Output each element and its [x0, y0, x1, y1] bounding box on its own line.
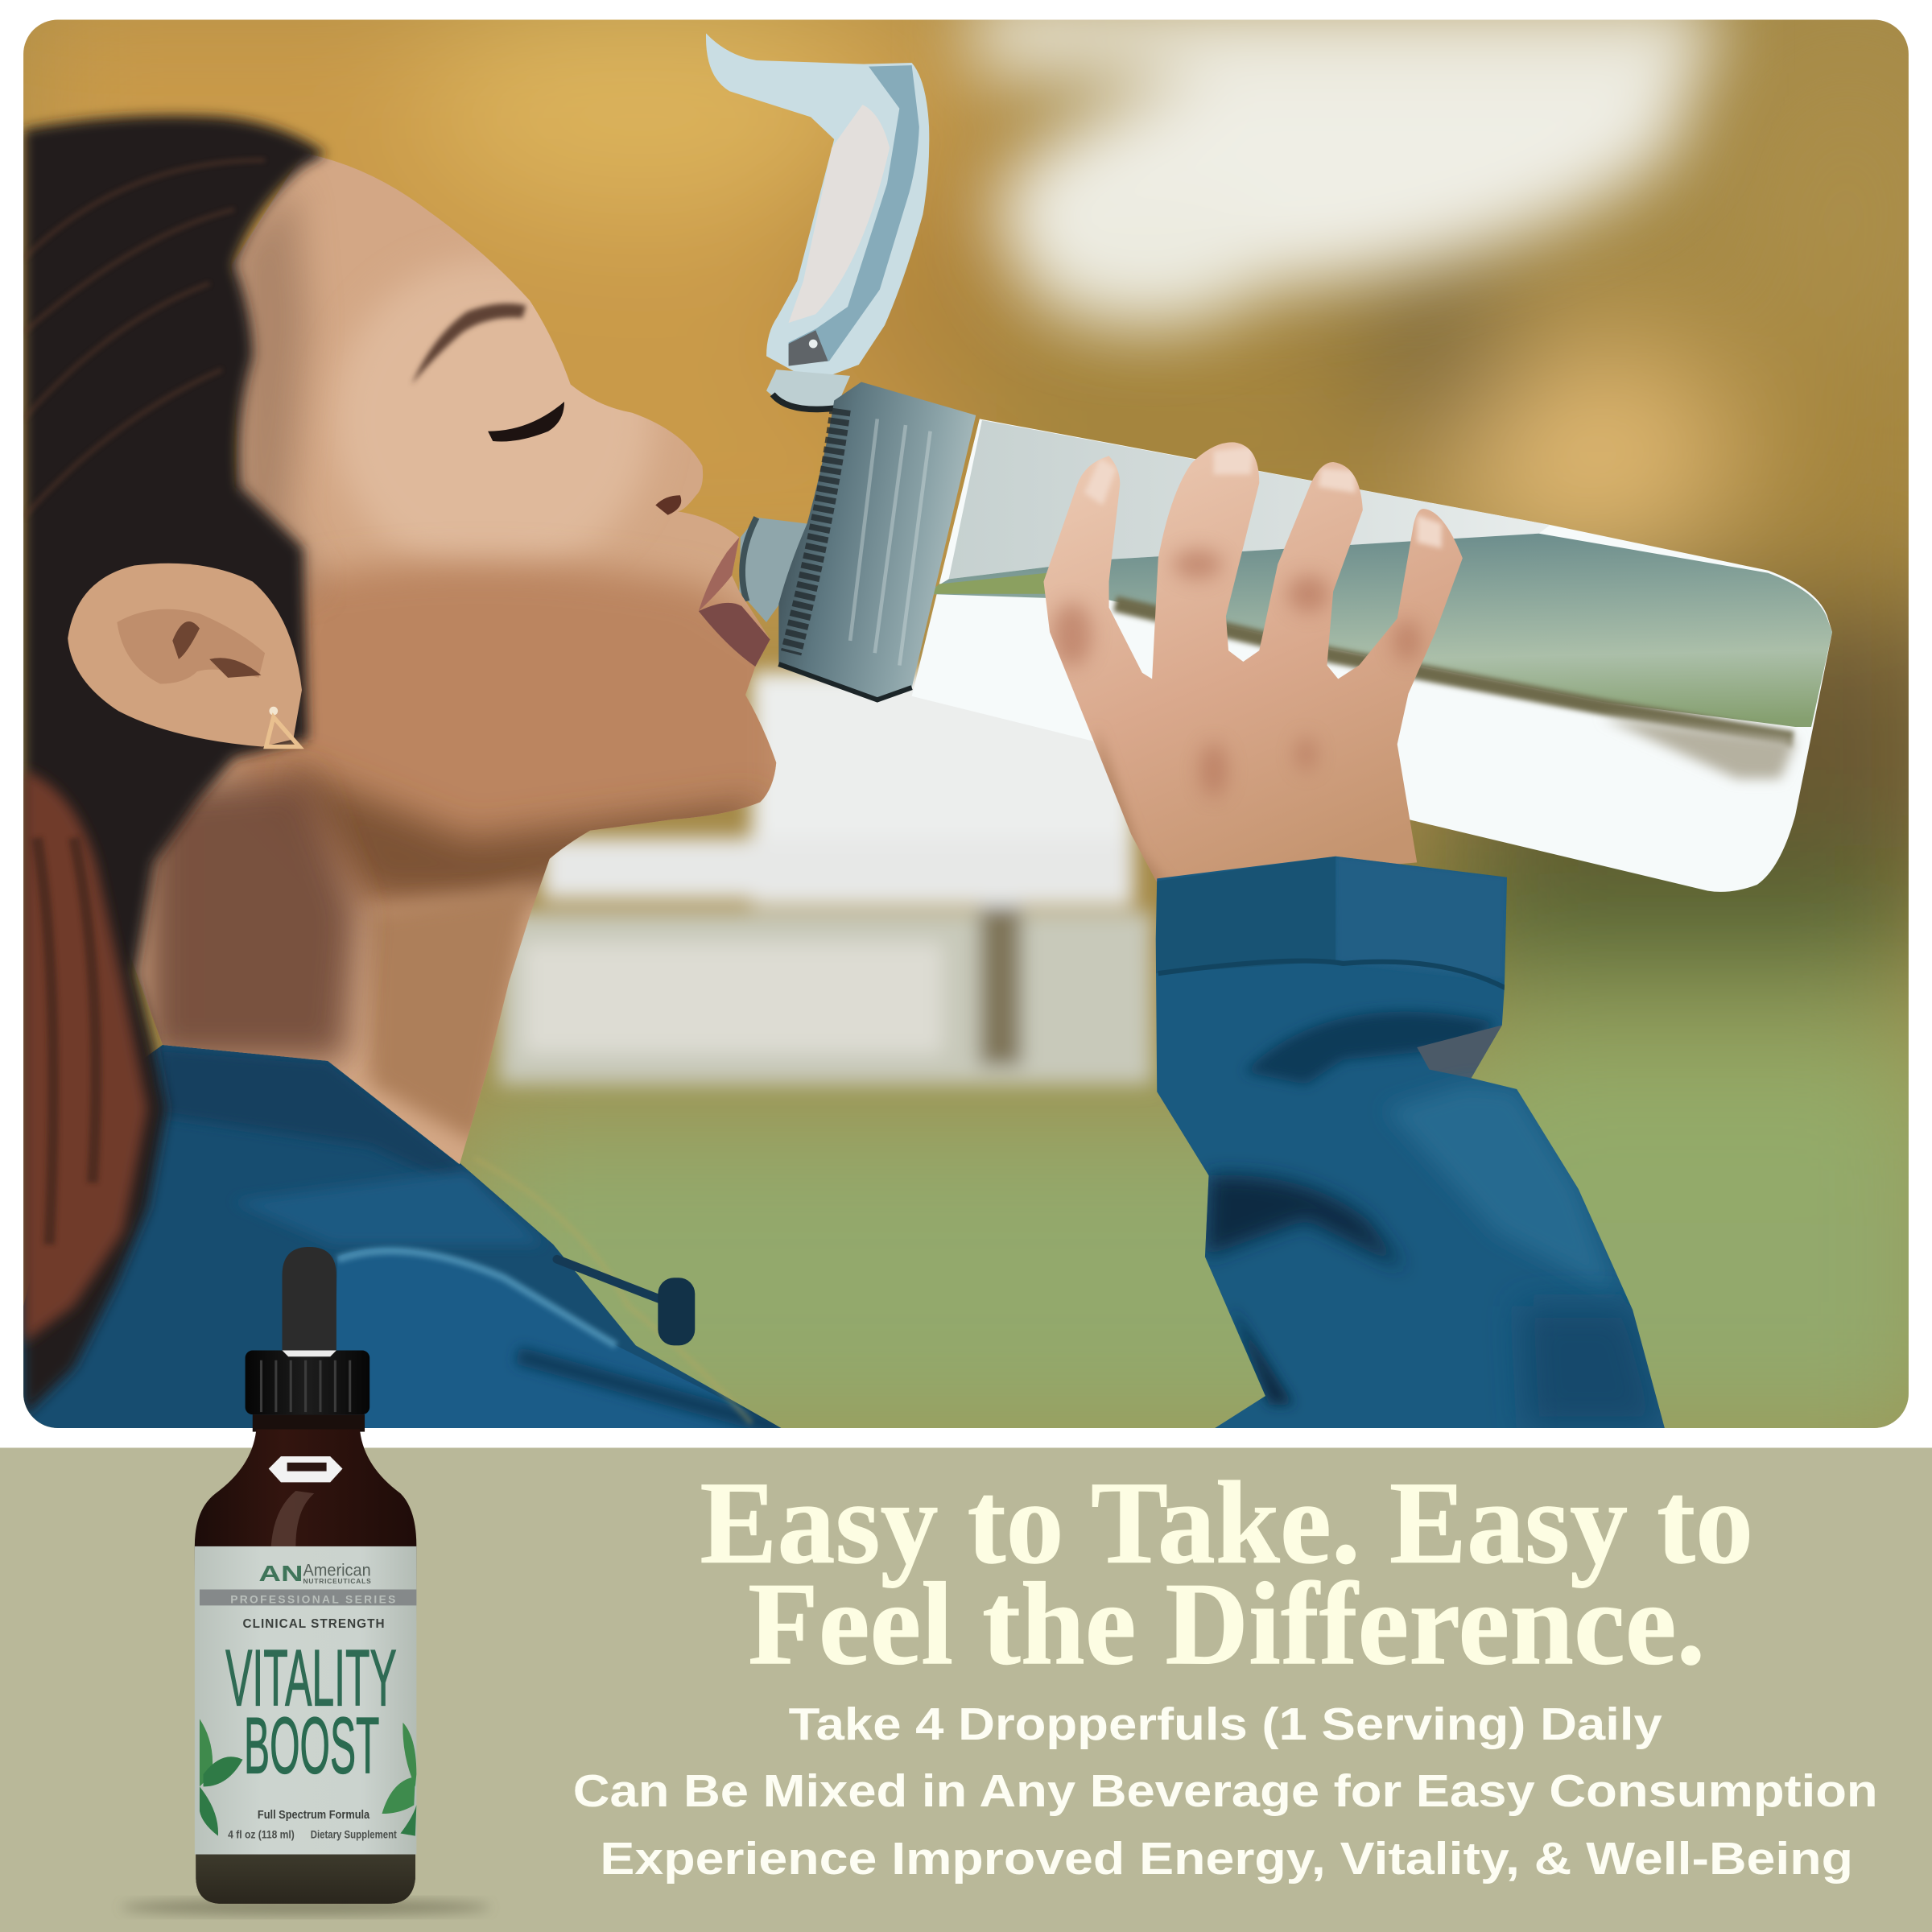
water bottle: [706, 33, 1832, 892]
small label text: [228, 1809, 397, 1841]
small label text: Full Spectrum Formula: [258, 1809, 370, 1822]
glass highlight: [269, 1456, 343, 1482]
small label text: Dietary Supplement: [311, 1829, 397, 1841]
heading: Easy to Take. Easy to: [700, 1457, 1753, 1588]
dark fold under cuff: [1245, 1012, 1497, 1084]
temple shadow near hair: [234, 185, 320, 592]
label: [195, 1546, 416, 1855]
nostril: [655, 495, 681, 515]
leaves: [200, 1719, 416, 1836]
lips: [699, 537, 739, 611]
jacket sleeve: [1156, 857, 1665, 1428]
lower glass tone: [196, 1855, 415, 1904]
eyebrow: [411, 303, 526, 385]
brand logo: NUTRICEUTICALS: [303, 1577, 371, 1585]
forehead highlight: [332, 258, 653, 579]
earring: [266, 707, 299, 747]
ear: [68, 564, 302, 747]
benefits text block: [573, 1699, 1878, 1885]
benefits text block: Experience Improved Energy, Vitality, & Well-Being: [600, 1834, 1853, 1885]
panel: product and text band: [0, 1447, 1932, 1932]
lid handle: [706, 33, 929, 382]
under jaw shadow: [283, 764, 764, 899]
deep shadow: [1205, 1175, 1405, 1269]
benefits text block: Can Be Mixed in Any Beverage for Easy Consumption: [573, 1766, 1878, 1817]
mouthpiece: [739, 518, 807, 622]
bottle collar: [778, 382, 976, 700]
woman: jacket body: [23, 1045, 781, 1428]
brand logo: [258, 1561, 371, 1586]
reflected horizon: [1115, 604, 1793, 739]
stray hair strands: [474, 1158, 752, 1423]
glass body: [195, 1430, 416, 1904]
clinical strength: CLINICAL STRENGTH: [243, 1617, 385, 1631]
product: Vitality Boost dropper bottle: [195, 1247, 416, 1904]
cap: [246, 1351, 369, 1414]
neck tones: [369, 887, 530, 1146]
product name: VITALITY: [225, 1633, 397, 1723]
product shadow: [121, 1900, 490, 1915]
lower cheek tone: [222, 562, 789, 912]
knuckle shading: [1052, 550, 1421, 797]
dropper bulb: [283, 1247, 336, 1356]
water band: [924, 534, 1832, 727]
small label text: 4 fl oz (118 ml): [228, 1829, 295, 1841]
professional series band: PROFESSIONAL SERIES: [230, 1593, 395, 1605]
neck: [253, 1414, 365, 1432]
bottle body: [912, 419, 1832, 892]
product name: [225, 1633, 397, 1791]
panel: photo of woman drinking from bottle: [0, 0, 1932, 1466]
benefits text block: Take 4 Dropperfuls (1 Serving) Daily: [789, 1699, 1662, 1750]
hand gripping bottle: [1043, 442, 1463, 887]
hood fold: [332, 1248, 781, 1428]
professional series band: [200, 1589, 416, 1605]
heading: [700, 1457, 1753, 1689]
brand logo: AN: [258, 1561, 303, 1586]
brand logo: American: [303, 1561, 371, 1580]
drawcord: [557, 1259, 671, 1303]
hair: [23, 115, 327, 1417]
product name: BOOST: [244, 1702, 379, 1791]
blurred park background: [0, 0, 1932, 1466]
green sliver: [931, 573, 1047, 594]
woman: neck and face: [23, 115, 789, 1417]
heading: Feel the Difference.: [748, 1558, 1705, 1689]
bright panel: [1386, 1084, 1614, 1294]
closed eye: [488, 402, 564, 441]
clear upper section: [949, 420, 1550, 579]
